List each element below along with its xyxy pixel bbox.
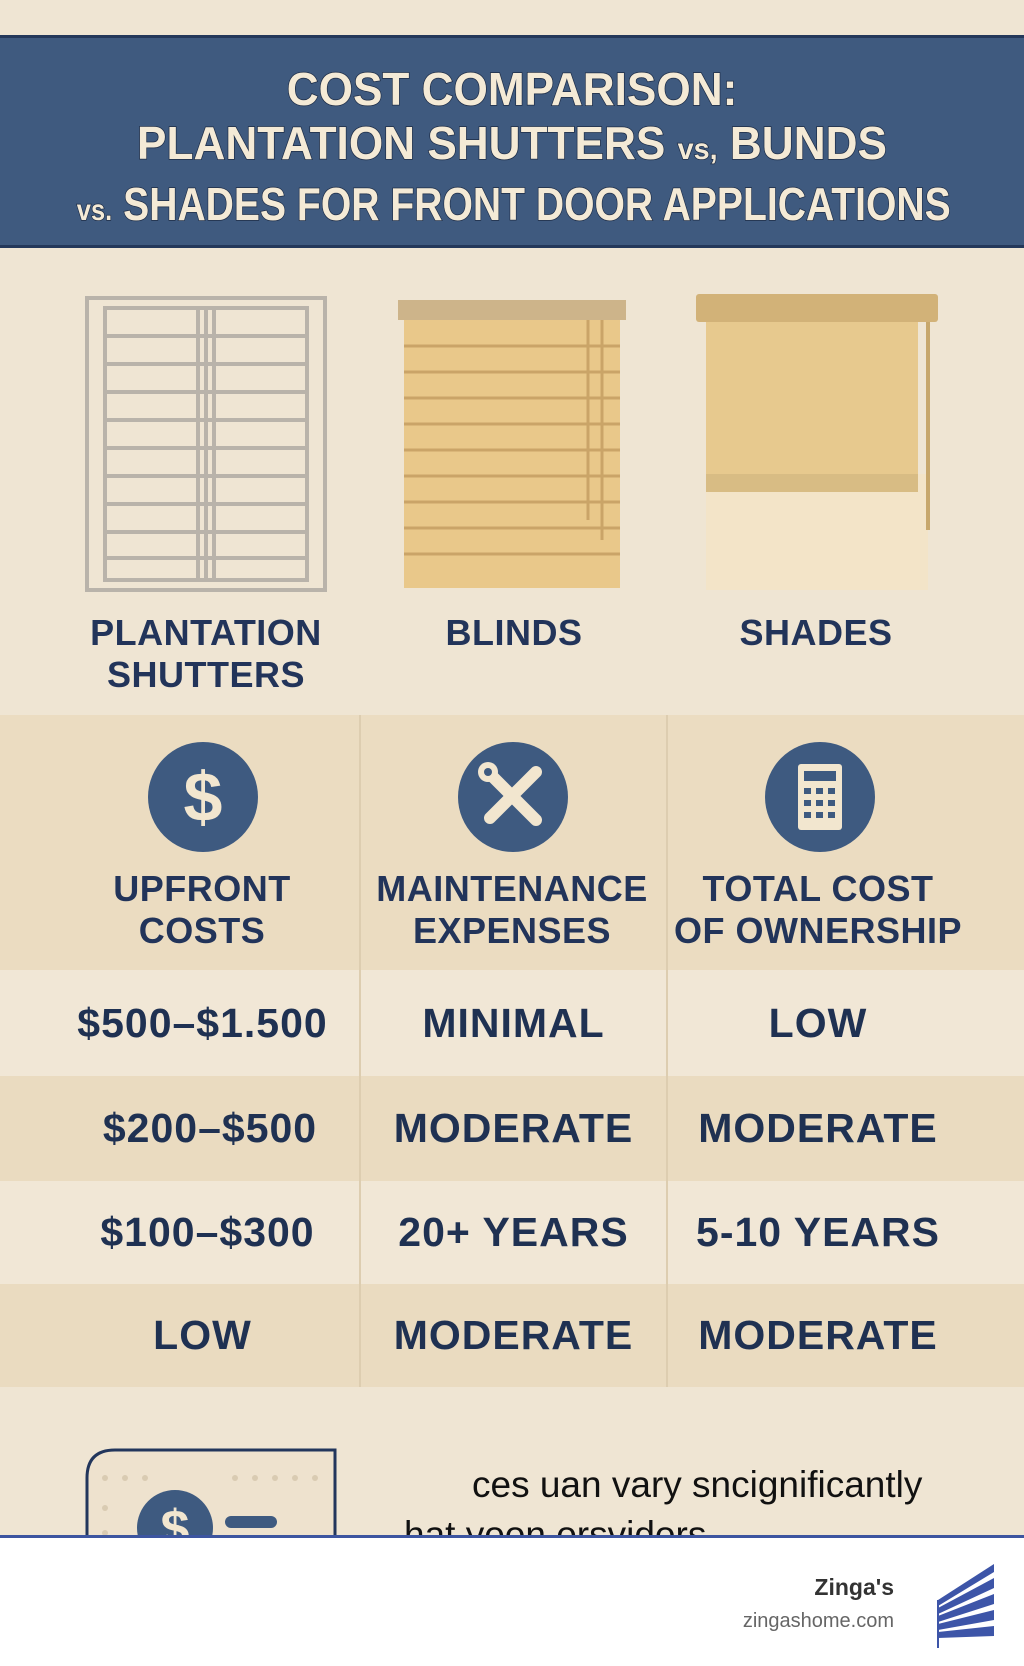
comparison table: MODERATE xyxy=(394,1312,633,1358)
label: blinds: BLINDS xyxy=(446,612,582,653)
comparison table: MODERATE xyxy=(394,1105,633,1151)
comparison table: MODERATE xyxy=(698,1105,938,1151)
header: maintenance expenses xyxy=(376,868,648,951)
label: plantation shutters: PLANTATION xyxy=(90,612,322,653)
brand name: Zinga's xyxy=(814,1574,894,1600)
icon: plantation shutters xyxy=(85,296,327,592)
comparison table: 5-10 YEARS xyxy=(696,1209,940,1255)
logo xyxy=(937,1564,994,1648)
header: maintenance expenses: EXPENSES xyxy=(413,910,611,951)
header: total cost of ownership: OF OWNERSHIP xyxy=(674,910,962,951)
label: shades: SHADES xyxy=(739,612,893,653)
comparison table xyxy=(0,715,1024,1387)
comparison table: MINIMAL xyxy=(422,1000,605,1046)
label: plantation shutters: SHUTTERS xyxy=(107,654,305,695)
comparison table: LOW xyxy=(769,1000,867,1046)
row 1: $500–$1.500 xyxy=(77,1000,328,1046)
icon: price card xyxy=(86,1448,336,1558)
note text line 2: hat yoon orsvidors xyxy=(404,1514,706,1555)
comparison table: MODERATE xyxy=(698,1312,938,1358)
row 3: $100–$300 xyxy=(100,1209,315,1255)
header: total cost of ownership: TOTAL COST xyxy=(702,868,934,909)
header: upfront costs: UPFRONT xyxy=(113,868,291,909)
title: vs. SHADES FOR FRONT DOOR APPLICATIONS xyxy=(77,178,951,230)
title: COST COMPARISON: xyxy=(287,63,737,115)
title xyxy=(76,63,951,230)
label: plantation shutters xyxy=(90,612,322,695)
footer xyxy=(0,1535,1024,1666)
brand url: zingashome.com xyxy=(743,1610,894,1632)
header: total cost of ownership xyxy=(674,868,962,951)
icon: dollar: $ xyxy=(184,758,222,836)
header: maintenance expenses: MAINTENANCE xyxy=(376,868,648,909)
icon: dollar xyxy=(148,742,258,852)
note text: ces uan vary sncignificantly xyxy=(472,1464,922,1505)
comparison table: 20+ YEARS xyxy=(398,1209,629,1255)
row 2: $200–$500 xyxy=(103,1105,317,1151)
title: PLANTATION SHUTTERS vs, BUNDS xyxy=(137,117,887,169)
icon: shades xyxy=(696,294,938,590)
icon: blinds xyxy=(398,300,626,588)
header: upfront costs: COSTS xyxy=(139,910,265,951)
icon: price card: $ xyxy=(161,1500,190,1558)
icon: calculator xyxy=(765,742,875,852)
row 4: LOW xyxy=(153,1312,252,1358)
icon: tools xyxy=(458,742,568,852)
header: upfront costs xyxy=(113,868,291,951)
header band xyxy=(0,35,1024,248)
